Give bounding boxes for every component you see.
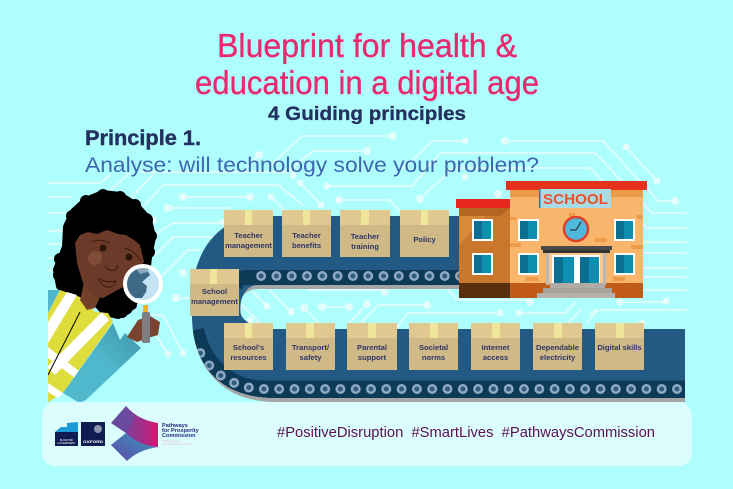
conveyor belt <box>192 216 690 402</box>
box: Dependable electricity: Dependable <box>536 343 579 352</box>
neck <box>80 283 100 310</box>
title: Blueprint for health & <box>217 27 517 64</box>
logo text: for Prosperity <box>162 428 200 434</box>
school sign: SCHOOL <box>543 191 608 208</box>
hashtags: #PositiveDisruption #SmartLives #PathwaysCommission <box>277 424 655 441</box>
box: Transport/safety <box>286 323 335 370</box>
magnifying glass <box>125 262 161 343</box>
box: Teacher management: management <box>225 241 272 250</box>
box: Digital skills <box>595 323 644 370</box>
box: Societal norms: Societal <box>419 343 448 352</box>
logo: Pathways mark <box>111 406 158 461</box>
logo: University of Oxford: OXFORD <box>83 439 103 444</box>
eyes <box>100 244 132 260</box>
box: Internet access <box>471 323 520 370</box>
windows <box>518 219 635 275</box>
box: Parental support: support <box>358 353 387 362</box>
face <box>75 230 144 298</box>
sleeve <box>63 323 141 402</box>
footer panel <box>42 402 692 466</box>
box: Teacher management: Teacher <box>234 231 263 240</box>
box: Societal norms <box>409 323 458 370</box>
box: Transport/safety: safety <box>300 353 322 362</box>
logo text: Inclusive Development <box>162 442 192 446</box>
clock <box>564 217 588 241</box>
box: School management <box>190 269 239 316</box>
principle question: Analyse: will technology solve your problem? <box>85 154 539 177</box>
logo text: Technology & <box>162 439 180 443</box>
circuit nodes <box>149 132 679 358</box>
box: Digital skills: Digital skills <box>597 343 642 352</box>
left wing <box>456 199 510 298</box>
logo text: Pathways <box>162 423 188 429</box>
logo text <box>162 423 200 446</box>
box: Teacher benefits: benefits <box>292 241 321 250</box>
rollers <box>195 276 690 390</box>
box: School management: School <box>202 287 227 296</box>
box: Parental support <box>347 323 397 370</box>
box: Teacher training: Teacher <box>351 232 379 241</box>
safety vest <box>48 290 113 402</box>
principle heading: Principle 1. <box>85 127 201 150</box>
entrance <box>537 246 615 298</box>
box: Teacher management <box>224 210 273 257</box>
box: Teacher training: training <box>351 242 379 251</box>
logo text: Commission <box>162 433 196 439</box>
box: Teacher benefits <box>282 210 331 257</box>
box: Internet access: access <box>483 353 508 362</box>
box: Dependable electricity: electricity <box>540 353 576 362</box>
shirt <box>48 290 60 313</box>
subtitle: 4 Guiding principles <box>268 104 466 125</box>
box: School's resources: School's <box>233 343 264 352</box>
facial lines <box>92 240 141 287</box>
box: Internet access: Internet <box>482 343 510 352</box>
title <box>195 27 539 101</box>
box: Societal norms: norms <box>422 353 445 362</box>
box: Policy: Policy <box>413 235 436 244</box>
school building <box>456 181 647 298</box>
title: education in a digital age <box>195 64 539 101</box>
hand <box>127 316 160 342</box>
logo: Blavatnik School of Government: GOVERNMENT <box>58 442 76 445</box>
main block <box>506 181 647 298</box>
circuit board pattern <box>48 136 686 354</box>
logo: University of Oxford <box>81 422 105 446</box>
box: Parental support: Parental <box>357 343 387 352</box>
box: Teacher benefits: Teacher <box>292 231 321 240</box>
box: Policy <box>400 210 449 257</box>
box: School's resources: resources <box>230 353 267 362</box>
hair <box>53 189 157 318</box>
person with magnifying glass <box>48 189 161 402</box>
box: Transport/safety: Transport/ <box>292 343 330 352</box>
box: School's resources <box>224 323 273 370</box>
box: Dependable electricity <box>533 323 582 370</box>
box: Teacher training <box>340 210 390 257</box>
cheek <box>88 251 102 265</box>
logo: Blavatnik School of Government <box>55 422 78 446</box>
box: School management: management <box>191 297 238 306</box>
logo: Blavatnik School of Government: BLAVATNIK <box>60 439 73 442</box>
